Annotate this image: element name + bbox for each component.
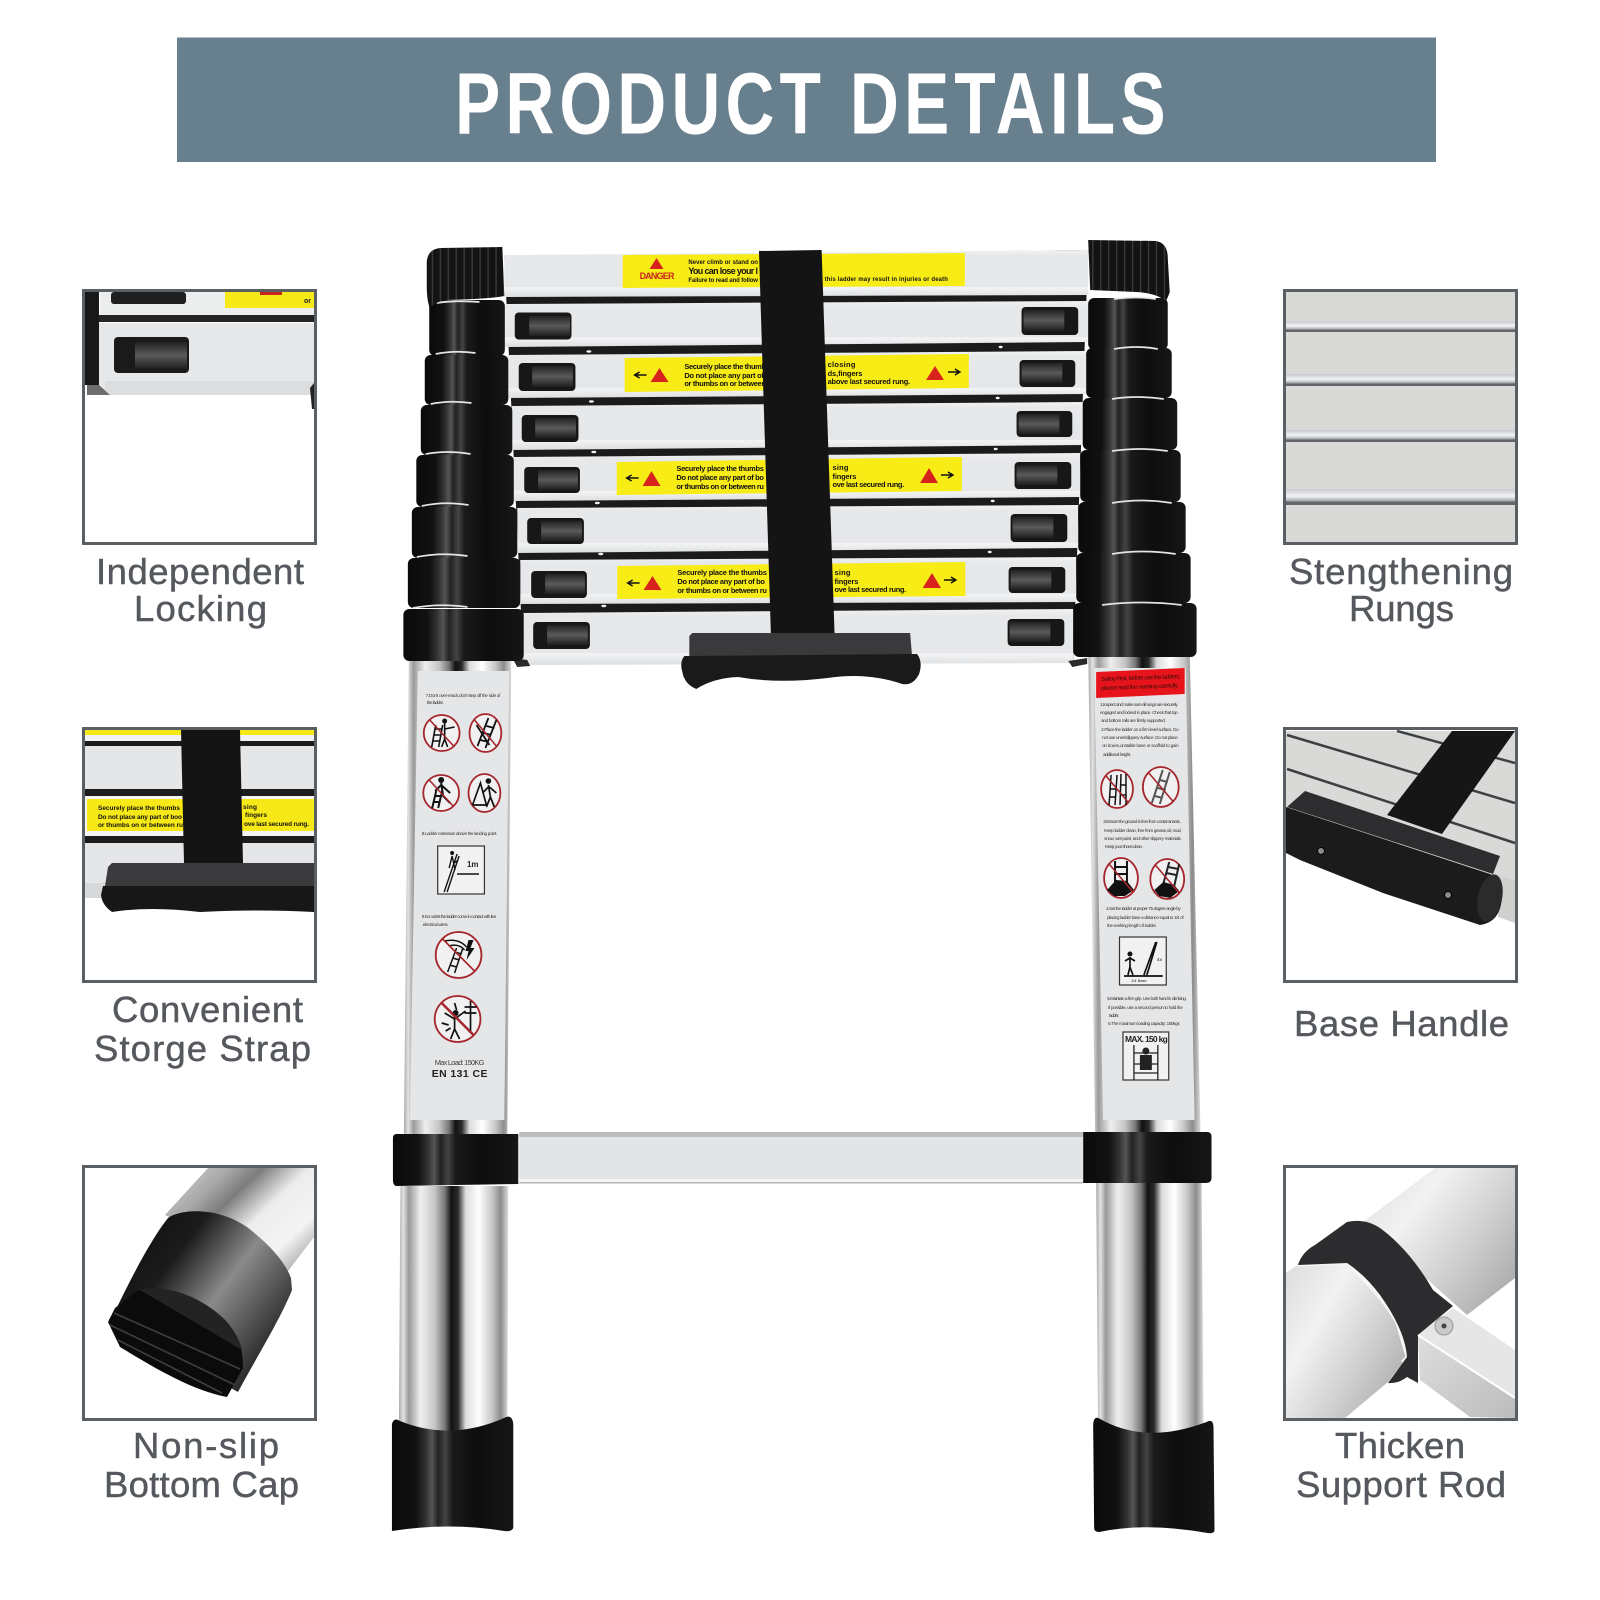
panel: independent locking [84, 290, 316, 544]
rung 2 with thumbs warning label: or thumbs on or between [684, 379, 766, 388]
icon: no stepping sideways [423, 775, 459, 811]
caption: Thicken Support Rod [1296, 1425, 1506, 1505]
top rung with danger label [504, 250, 1088, 297]
right safety sticker: 3.Ensure the ground is free from contaminants. [1103, 819, 1181, 824]
panel: convenient storage strap: sing [243, 804, 257, 811]
rung 6 with thumbs warning label: ove last secured rung. [835, 585, 906, 594]
panel: convenient storage strap [84, 728, 316, 982]
right upper tube [1088, 650, 1201, 1136]
icon: ladder angle 4 to 1: 1/4 Base [1131, 978, 1147, 983]
icon: one metre extension [438, 846, 484, 894]
icon: no uneven ground left [1104, 858, 1138, 898]
rung 6 with thumbs warning label: Securely place the thumbs [677, 568, 767, 577]
right clamp [1083, 1132, 1212, 1183]
right safety sticker: If possible, use a second person to hold the [1108, 1005, 1183, 1010]
caption: Stengthening Rungs: Rungs [1349, 588, 1454, 629]
right safety sticker: Keep ladder clean, free from grease,oil, mud, [1104, 828, 1182, 833]
rung 6 with thumbs warning label: Do not place any part of bo [677, 577, 765, 586]
panel: thicken support rod [1284, 1166, 1516, 1420]
right safety sticker: 2.Place the ladder on a firm level surface. Do [1101, 727, 1179, 732]
rung 2 with thumbs warning label: above last secured rung. [828, 377, 910, 386]
right safety sticker: snow, wet paint, and other slippery materials. [1104, 836, 1182, 841]
rung 2 with thumbs warning label: Securely place the thumb [684, 362, 766, 371]
right safety sticker: Keep your shoes clean. [1105, 844, 1143, 849]
right safety sticker: additional height. [1103, 752, 1131, 757]
left safety sticker [410, 671, 509, 1120]
left safety sticker: 7.Don't over-reach,don't step off the side of [426, 693, 501, 698]
left ribbed top cap [427, 247, 504, 308]
rung 2 with thumbs warning label: Do not place any part of [684, 371, 764, 380]
icon: ladder angle 4 to 1 [1120, 937, 1166, 985]
ladder illustration [392, 240, 1215, 1533]
icon: max 150 kg: MAX. 150 kg [1125, 1034, 1168, 1044]
panel: strengthening rungs [1284, 290, 1516, 544]
icon: no ladder joining [1101, 770, 1133, 808]
right safety sticker: placing ladder base a distance equal to 1/4 of [1107, 915, 1184, 920]
rung 4 with thumbs warning label [514, 453, 1080, 501]
left safety sticker: electrical wires. [423, 922, 449, 927]
panel: convenient storage strap: Do not place any part of boo [98, 814, 182, 821]
right safety sticker: 5.Maintain a firm grip. Use both hand in climbing. [1107, 996, 1187, 1001]
icon: max 150 kg [1123, 1032, 1169, 1080]
caption: Convenient Storge Strap [94, 989, 311, 1069]
red warning strip: Safety First, before use the ladders, [1101, 674, 1181, 683]
rung 6 with thumbs warning label: or thumbs on or between ru [677, 586, 767, 595]
left foot cap [392, 1417, 513, 1531]
left clamp [393, 1134, 518, 1186]
storage strap [759, 250, 835, 634]
rung 5 with locking buttons [517, 505, 1078, 553]
caption: Convenient Storge Strap: Storge Strap [94, 1028, 311, 1069]
left safety sticker: 9.Do not let the ladder come in contact with live [422, 914, 497, 919]
rung 3 with locking buttons [512, 402, 1083, 450]
caption: Thicken Support Rod: Thicken [1335, 1425, 1465, 1466]
icon: no tilted ladder [1143, 767, 1179, 807]
rung 7 with locking buttons [523, 609, 1073, 665]
panel: convenient storage strap: Securely place the thumbs [98, 805, 180, 812]
lower right tube [1096, 1183, 1204, 1434]
rung 6 with thumbs warning label [520, 557, 1076, 604]
icon: ladder angle 4 to 1: 4x [1157, 957, 1163, 963]
caption: Independent Locking: Independent [96, 551, 304, 592]
icon: no step ladder [469, 774, 500, 812]
rung 4 with thumbs warning label: sing [833, 463, 849, 472]
rung 6 with thumbs warning label: sing [835, 568, 851, 577]
caption: Thicken Support Rod: Support Rod [1296, 1464, 1506, 1505]
panel: convenient storage strap: or thumbs on or between ru [98, 822, 183, 829]
heading: PRODUCT DETAILS: PRODUCT DETAILS [455, 54, 1166, 152]
rung 4 with thumbs warning label: ove last secured rung. [833, 480, 904, 489]
bottom rung [519, 1132, 1083, 1184]
rung 6 with thumbs warning label: fingers [835, 577, 858, 586]
top rung with danger label: You can lose your l [688, 266, 758, 276]
right telescopic joints [1073, 298, 1197, 657]
rung 4 with thumbs warning label: fingers [833, 472, 856, 481]
icon: no leaning ladder [470, 714, 501, 752]
icon: one metre extension: 1m [467, 860, 479, 869]
caption: Convenient Storge Strap: Convenient [112, 989, 303, 1030]
red warning strip: please read the warning carefully. [1101, 683, 1179, 692]
right safety sticker: engaged and locked in place. Check that top [1100, 710, 1178, 715]
rung 4 with thumbs warning label: Securely place the thumbs [676, 464, 764, 473]
right safety sticker: ladder. [1109, 1013, 1119, 1018]
rivet glints between rungs [586, 346, 1003, 607]
caption: Independent Locking [96, 551, 304, 629]
rungs backing [504, 250, 1088, 660]
right safety sticker: on boxes,unstable base or scaffold to gain [1102, 743, 1179, 748]
left upper tube [404, 650, 511, 1136]
caption: Base Handle: Base Handle [1294, 1003, 1509, 1044]
title banner [177, 38, 1436, 162]
rung 4 with thumbs warning label: or thumbs on or between ru [676, 482, 764, 491]
right safety sticker: and bottom rails are firmly supported. [1101, 718, 1166, 723]
left safety sticker: the ladder. [427, 700, 444, 705]
red warning strip [1096, 668, 1185, 698]
caption: Stengthening Rungs: Stengthening [1289, 551, 1513, 592]
right safety sticker: 1.Inspect and make sure all rungs are securely [1100, 702, 1178, 707]
panel: convenient storage strap: fingers [245, 812, 267, 819]
right ribbed top cap [1088, 240, 1170, 301]
top rung with danger label: DANGER [640, 271, 675, 281]
icon: no uneven ground right [1150, 859, 1184, 899]
caption: Non-slip Bottom Cap [104, 1425, 299, 1505]
base handle [681, 633, 921, 689]
load rating [432, 1058, 487, 1080]
icon: no electrical hazard [435, 996, 480, 1042]
right safety sticker: not use unes/slippery surface. Do not place [1102, 735, 1178, 740]
panel: convenient storage strap: ove last secured rung. [244, 821, 309, 828]
rung 2 with thumbs warning label: ds,fingers [828, 369, 862, 378]
icon: no contact with wires [436, 932, 481, 978]
load rating: Max Load: 150KG [435, 1058, 485, 1067]
rung 2 with thumbs warning label [507, 351, 1086, 398]
right safety sticker: 4.Set the ladder at proper 75 degree angle by [1106, 906, 1181, 911]
rung 4 with thumbs warning label: Do not place any part of bo [676, 473, 764, 482]
panel: base handle [1284, 728, 1516, 982]
left safety sticker: 8.Ladder extension above the landing point. [422, 831, 497, 836]
icon: no over-reaching [424, 715, 460, 751]
left telescopic joints [403, 300, 524, 661]
caption: Non-slip Bottom Cap: Bottom Cap [104, 1464, 299, 1505]
rung 1 with locking buttons [504, 301, 1088, 347]
right safety sticker [1094, 668, 1195, 1120]
panel: non-slip bottom cap [84, 1166, 316, 1420]
caption: Stengthening Rungs [1289, 551, 1513, 629]
right foot cap [1093, 1418, 1215, 1533]
caption: Independent Locking: Locking [134, 588, 267, 629]
load rating: EN 131 CE [432, 1069, 487, 1080]
top rung with danger label: this ladder may result in injuries or death [825, 277, 948, 283]
right safety sticker: the working length of ladder. [1107, 923, 1157, 928]
top rung with danger label: Failure to read and follow [688, 278, 758, 284]
panel: independent locking: or [304, 298, 311, 305]
lower left tube [399, 1186, 508, 1432]
rung 2 with thumbs warning label: closing [828, 360, 856, 369]
rung end brackets [512, 658, 1087, 667]
top rung with danger label: Never climb or stand on [688, 260, 758, 266]
caption: Non-slip Bottom Cap: Non-slip [133, 1425, 279, 1466]
right safety sticker: 6.The maximum loading capacity: 150kgs [1108, 1021, 1180, 1026]
